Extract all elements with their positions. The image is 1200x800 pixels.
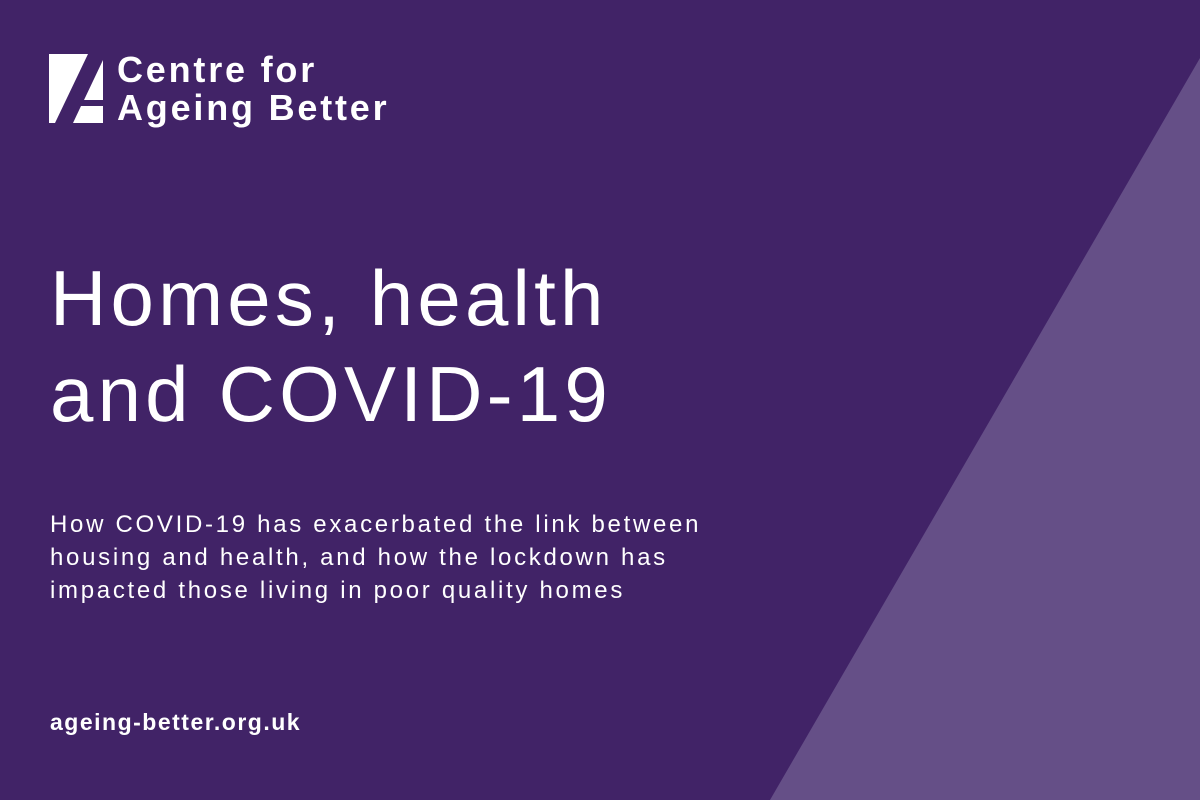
title: Homes, health <box>50 254 608 342</box>
url: ageing-better.org.uk <box>50 709 301 735</box>
subtitle: impacted those living in poor quality homes <box>50 577 625 604</box>
title <box>50 254 612 438</box>
title: and COVID-19 <box>50 350 612 438</box>
logo text: Centre for <box>117 49 317 90</box>
icon: logo mark <box>49 54 103 123</box>
subtitle: housing and health, and how the lockdown has <box>50 544 668 571</box>
logo text: Ageing Better <box>117 87 389 128</box>
logo <box>49 49 389 128</box>
logo text <box>117 49 389 128</box>
subtitle: How COVID-19 has exacerbated the link between <box>50 511 701 538</box>
subtitle <box>50 511 701 604</box>
